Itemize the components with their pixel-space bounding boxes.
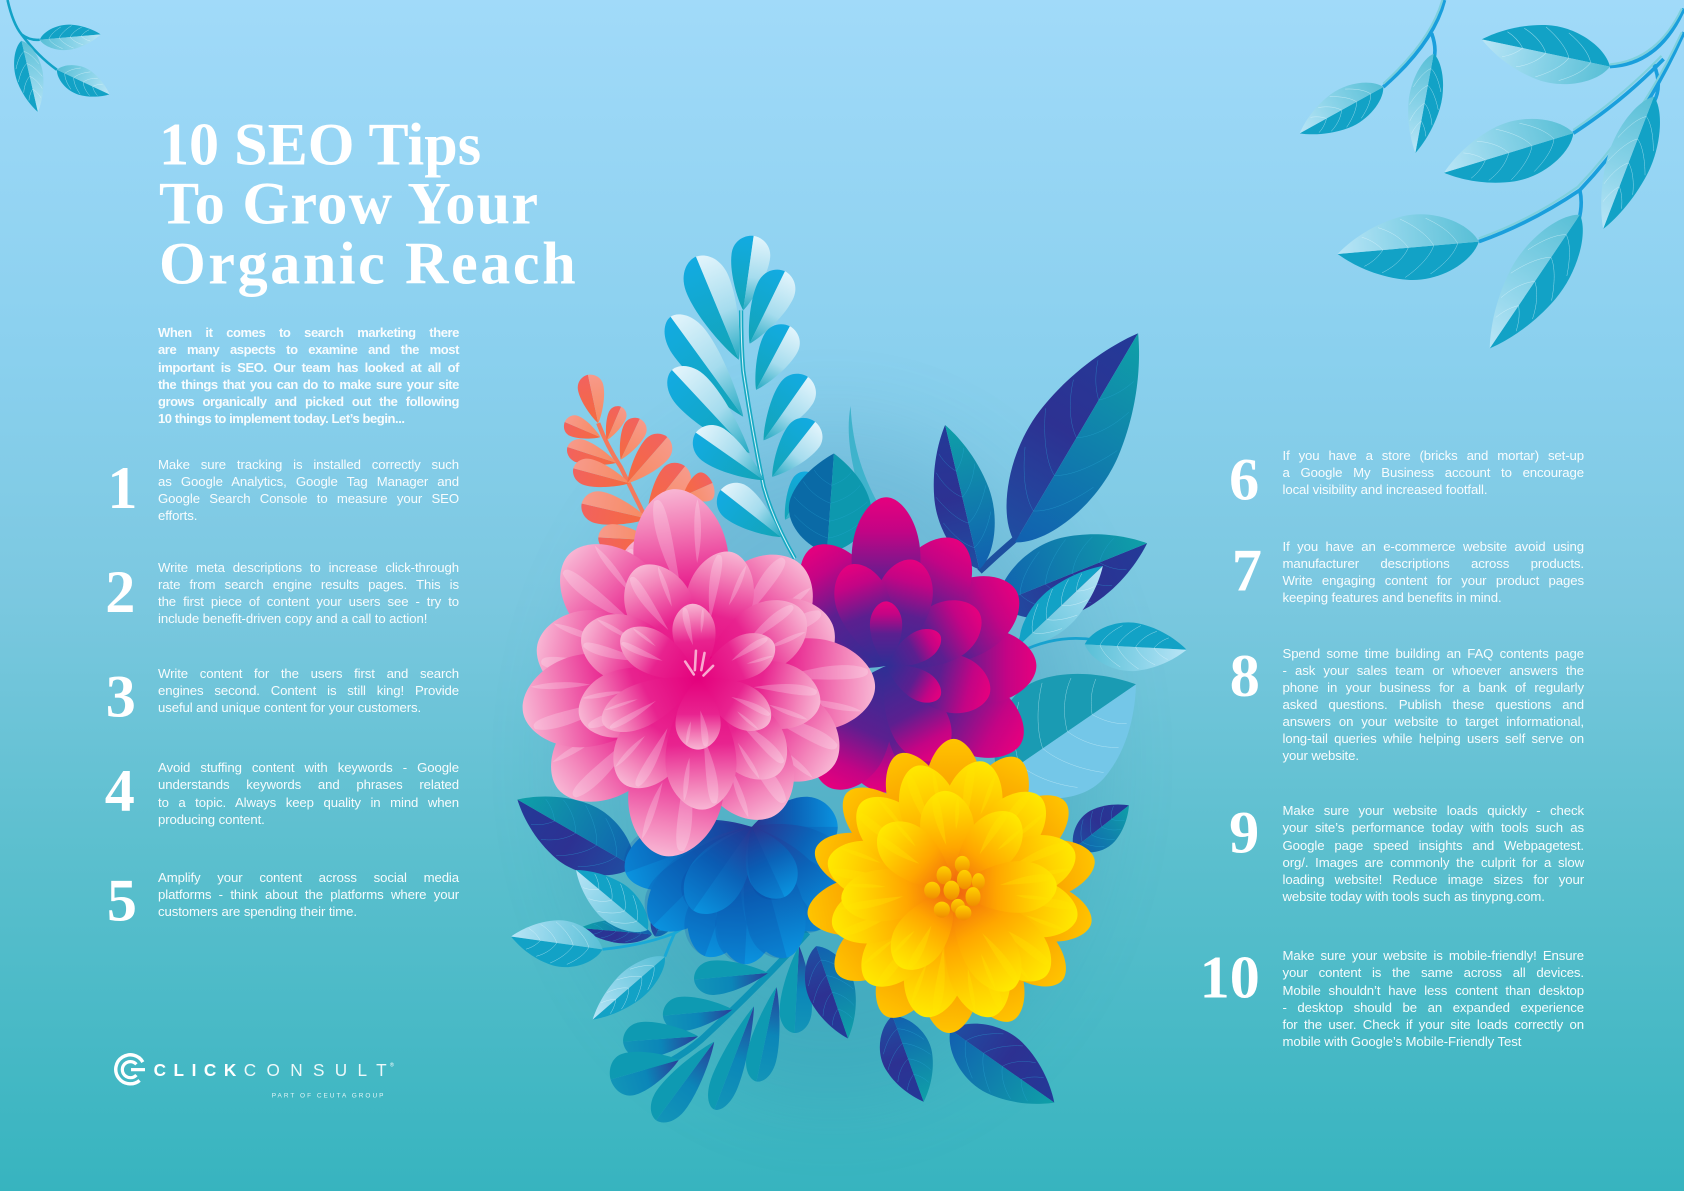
tip 7 text: keeping features and benefits in mind. xyxy=(1282,590,1502,605)
soft shadow behind bouquet xyxy=(575,430,1090,1095)
tip 2 text: rate from search engine results pages. This is xyxy=(158,577,459,592)
tip 5 text: customers are spending their time. xyxy=(158,904,357,919)
tip 2 text xyxy=(158,560,459,626)
right navy leaf xyxy=(983,508,1161,639)
tip 5 text xyxy=(158,870,460,919)
pale small leaf xyxy=(1006,551,1117,659)
tip 4 text xyxy=(158,760,459,827)
tip 6 text xyxy=(1282,448,1584,497)
logo icon xyxy=(116,1055,145,1084)
coral fern xyxy=(561,372,719,554)
intro text: are many aspects to examine and the most xyxy=(158,342,459,357)
tip 3 text: Write content for the users first and search xyxy=(158,666,459,681)
tip numbers: 5 xyxy=(107,867,137,934)
tip 8 text: long-tail queries while helping users self serve on xyxy=(1282,731,1584,746)
logo wordmark xyxy=(154,1060,394,1100)
logo wordmark: ® xyxy=(390,1061,394,1068)
big teal and light blue leaf xyxy=(964,634,1170,829)
intro text: 10 things to implement today. Let’s begin... xyxy=(158,411,405,426)
tip 6 text: local visibility and increased footfall. xyxy=(1282,482,1487,497)
tip 1 text: Make sure tracking is installed correctly such xyxy=(158,456,459,472)
intro text: the things that you can do to make sure your site xyxy=(158,377,459,392)
tip 2 text: Write meta descriptions to increase click-through xyxy=(158,560,459,574)
central dark leaf xyxy=(786,451,875,556)
tip 8 text: - ask your sales team or whoever answers the xyxy=(1282,663,1584,678)
intro text xyxy=(158,325,460,426)
tip 1 text: efforts. xyxy=(158,508,197,523)
tip numbers: 3 xyxy=(106,663,136,730)
intro text: grows organically and picked out the following xyxy=(158,394,459,409)
bottom leaf two xyxy=(932,1004,1072,1129)
tip 4 text: producing content. xyxy=(158,812,265,827)
tip 9 text: Google page speed insights and Webpagetest. xyxy=(1282,838,1584,853)
tip 6 text: If you have a store (bricks and mortar) set-up xyxy=(1282,448,1584,463)
tip 8 text: your website. xyxy=(1282,748,1359,763)
tip 10 text: your content is the same across all devices. xyxy=(1282,965,1584,980)
intro text: important is SEO. Our team has looked at all of xyxy=(158,360,459,375)
logo: Click Consult xyxy=(116,1055,394,1100)
branch: top-left leaves xyxy=(8,0,115,115)
tip 10 text: Mobile shouldn’t have less content than desktop xyxy=(1282,983,1584,998)
tip 9 text: org/. Images are commonly the culprit for a slow xyxy=(1282,855,1584,870)
blue flower xyxy=(615,797,860,967)
tip 1 text: Google Search Console to measure your SEO xyxy=(158,491,459,506)
tip numbers: 7 xyxy=(1232,538,1262,605)
pale teal fern xyxy=(654,233,830,558)
tip 1 text: as Google Analytics, Google Tag Manager and xyxy=(158,474,459,489)
tip 5 text: platforms - think about the platforms where your xyxy=(158,887,459,902)
tip 3 text xyxy=(158,666,459,715)
branch: top-right leaves xyxy=(1290,0,1684,364)
leaf beside lower fern xyxy=(794,938,871,1046)
tip numbers: 1 xyxy=(107,455,137,522)
small leaf right of yellow flower xyxy=(1062,790,1141,864)
flower bouquet xyxy=(501,233,1188,1131)
title: To Grow Your xyxy=(159,170,538,237)
left small dark leaves xyxy=(579,893,684,946)
tip 9 text: loading website! Reduce image sizes for your xyxy=(1282,872,1584,887)
tip 8 text: asked questions. Publish these questions and xyxy=(1282,697,1584,712)
logo wordmark: PART OF CEUTA GROUP xyxy=(272,1093,383,1100)
tip 9 text xyxy=(1282,803,1584,904)
tip 10 text: Make sure your website is mobile-friendly! Ensure xyxy=(1282,948,1584,963)
logo wordmark: CLICK xyxy=(154,1060,237,1080)
tip 10 text: mobile with Google’s Mobile-Friendly Test xyxy=(1282,1034,1521,1049)
tip 8 text xyxy=(1282,646,1584,763)
tip 8 text: phone in your business for a bank of regularly xyxy=(1282,680,1584,695)
tip 3 text: engines second. Content is still king! Provide xyxy=(158,683,459,698)
title xyxy=(159,111,576,298)
tip 9 text: website today with tools such as tinypng.com. xyxy=(1282,889,1545,904)
tip 2 text: the first piece of content your users see - try to xyxy=(158,594,459,609)
tip 9 text: Make sure your website loads quickly - check xyxy=(1282,803,1584,818)
tip numbers xyxy=(105,446,1262,1012)
tip numbers: 8 xyxy=(1230,643,1260,710)
magenta flower xyxy=(758,497,1040,806)
tip numbers: 9 xyxy=(1229,800,1259,867)
lower teal fern xyxy=(605,932,815,1131)
tip 10 text xyxy=(1282,948,1584,1049)
tip 2 text: include benefit-driven copy and a call to action! xyxy=(158,611,427,626)
thin grass blade xyxy=(849,406,885,526)
logo wordmark: CONSULT xyxy=(244,1060,387,1080)
tip 8 text: answers on your website to target informational, xyxy=(1282,714,1584,729)
left pale leaves with stems xyxy=(508,855,696,1032)
right pale leaf with stem xyxy=(1020,620,1188,674)
yellow flower xyxy=(803,739,1101,1034)
title: 10 SEO Tips xyxy=(159,111,481,178)
tip 10 text: for the user. Check if your site loads correctly on xyxy=(1282,1017,1584,1032)
tip 7 text: If you have an e-commerce website avoid using xyxy=(1282,539,1584,554)
tip 3 text: useful and unique content for your customers. xyxy=(158,700,421,715)
tip numbers: 4 xyxy=(105,758,135,825)
intro text: When it comes to search marketing there xyxy=(158,325,459,340)
title: Organic Reach xyxy=(159,231,576,298)
left dark leaf xyxy=(501,771,650,895)
tip numbers: 6 xyxy=(1229,446,1259,513)
tip 7 text: Write engaging content for your product pages xyxy=(1282,573,1584,588)
tip numbers: 10 xyxy=(1200,945,1260,1012)
tip 5 text: Amplify your content across social media xyxy=(158,870,459,885)
tip 6 text: a Google My Business account to encourage xyxy=(1282,465,1584,480)
tip numbers: 2 xyxy=(105,559,135,626)
tip 4 text: to a topic. Always keep quality in mind when xyxy=(158,795,459,810)
tip 10 text: - desktop should be an expanded experience xyxy=(1282,1000,1584,1015)
tip 7 text: manufacturer descriptions across products. xyxy=(1282,556,1584,571)
tip 4 text: Avoid stuffing content with keywords - Google xyxy=(158,760,459,775)
tip 8 text: Spend some time building an FAQ contents page xyxy=(1282,646,1584,660)
tip 4 text: understands keywords and phrases related xyxy=(158,777,459,792)
tip 9 text: your site’s performance today with tools such as xyxy=(1282,820,1584,835)
bottom leaf one xyxy=(869,1007,948,1110)
tip 1 text xyxy=(158,456,459,523)
middle navy leaf xyxy=(917,418,1007,576)
yellow flower stamens xyxy=(924,856,985,920)
big upper-right leaf xyxy=(975,310,1178,571)
pink flower xyxy=(514,483,877,865)
tip 7 text xyxy=(1282,539,1584,605)
